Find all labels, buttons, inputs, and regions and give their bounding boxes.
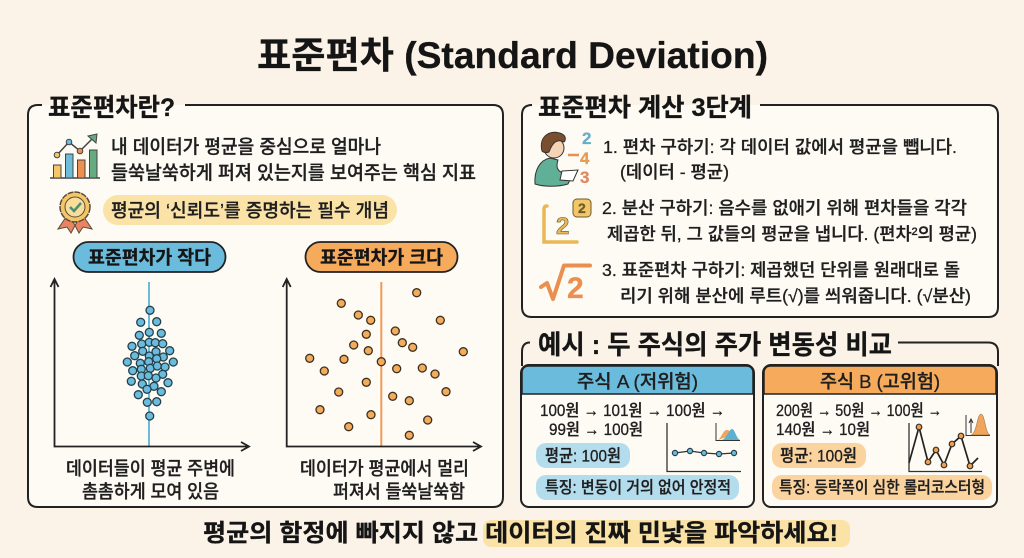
icon: person calculating: 2 (582, 129, 591, 148)
line chart: stock B (909, 414, 990, 472)
text: definition: 내 데이터가 평균을 중심으로 얼마나 (111, 136, 381, 158)
text: step 1: 1. 편차 구하기: 각 데이터 값에서 평균을 뺍니다. (603, 137, 957, 157)
pill: average B: 평균: 100원 (780, 446, 857, 466)
icon: medal (58, 192, 92, 233)
icon: person calculating (535, 129, 591, 187)
price series: stock B: 140원 → 10원 (776, 420, 870, 439)
scatter chart: large SD (283, 279, 481, 451)
caption: small SD: 촘촘하게 모여 있음 (82, 481, 219, 502)
price series: stock A: 100원 → 101원 → 100원 → (540, 401, 725, 420)
badge: large SD (306, 242, 458, 272)
conclusion banner: 평균의 함정에 빠지지 않고 데이터의 진짜 민낯을 파악하세요! (203, 520, 838, 547)
panel: calculation steps (522, 94, 998, 317)
pill: feature A (536, 475, 739, 500)
caption: large SD: 퍼져서 들쑥날쑥함 (333, 481, 465, 502)
caption: large SD: 데이터가 평균에서 멀리 (300, 458, 469, 479)
price series: stock B (776, 401, 942, 439)
icon: square root: 2 (567, 272, 584, 305)
heading: stock example: 예시 : 두 주식의 주가 변동성 비교 (538, 330, 892, 360)
badge: small SD (74, 242, 226, 272)
icon: square (544, 199, 591, 242)
text: step 2: 2. 분산 구하기: 음수를 없애기 위해 편차들을 각각 (602, 198, 967, 218)
icon: person calculating: 4 (580, 149, 590, 168)
card: stock B (763, 365, 997, 507)
panel: what is standard deviation (28, 94, 503, 507)
text: step 1 (603, 137, 957, 182)
caption: large SD (300, 458, 469, 502)
pill: average A (536, 443, 630, 468)
pill: feature B: 특징: 등락폭이 심한 롤러코스터형 (779, 478, 985, 497)
text: step 1: (데이터 - 평균) (620, 162, 729, 182)
card: stock A (521, 365, 754, 507)
card title: stock A: 주식 A (저위험) (577, 371, 698, 392)
icon: square root (541, 266, 590, 305)
text: definition (111, 136, 476, 184)
text: definition: 들쑥날쑥하게 퍼져 있는지를 보여주는 핵심 지표 (111, 162, 476, 184)
text: step 3 (602, 260, 971, 306)
icon: square: 2 (556, 213, 569, 240)
badge: small SD: 표준편차가 작다 (88, 247, 211, 268)
price series: stock A (540, 401, 725, 439)
callout: reliability (103, 195, 397, 225)
caption: small SD: 데이터들이 평균 주변에 (66, 458, 235, 479)
badge: large SD: 표준편차가 크다 (320, 247, 443, 268)
callout: reliability: 평균의 ‘신뢰도’를 증명하는 필수 개념 (111, 200, 389, 221)
icon: bar chart with arrow (50, 134, 100, 178)
pill: average A: 평균: 100원 (545, 446, 621, 466)
text: step 3: 리기 위해 분산에 루트(√)를 씌워줍니다. (√분산) (620, 286, 971, 306)
line chart: stock A (667, 423, 741, 472)
scatter chart: small SD (50, 279, 249, 451)
card title: stock B: 주식 B (고위험) (820, 371, 940, 392)
price series: stock A: 99원 → 100원 (549, 420, 643, 439)
heading: what is standard deviation: 표준편차란? (48, 94, 175, 122)
text: step 3: 3. 표준편차 구하기: 제곱했던 단위를 원래대로 돌 (602, 260, 960, 280)
icon: square: 2 (578, 200, 586, 216)
panel: stock example (521, 330, 998, 507)
pill: average B (772, 443, 866, 468)
text: step 2: 제곱한 뒤, 그 값들의 평균을 냅니다. (편차²의 평균) (607, 224, 977, 244)
text: step 2 (602, 198, 977, 244)
pill: feature B (772, 475, 992, 500)
price series: stock B: 200원 → 50원 → 100원 → (776, 401, 942, 420)
heading: calculation steps: 표준편차 계산 3단계 (538, 94, 752, 122)
title: 표준편차 (Standard Deviation) (257, 35, 768, 76)
icon: person calculating: 3 (580, 168, 589, 187)
caption: small SD (66, 458, 235, 502)
pill: feature A: 특징: 변동이 거의 없어 안정적 (545, 478, 731, 497)
